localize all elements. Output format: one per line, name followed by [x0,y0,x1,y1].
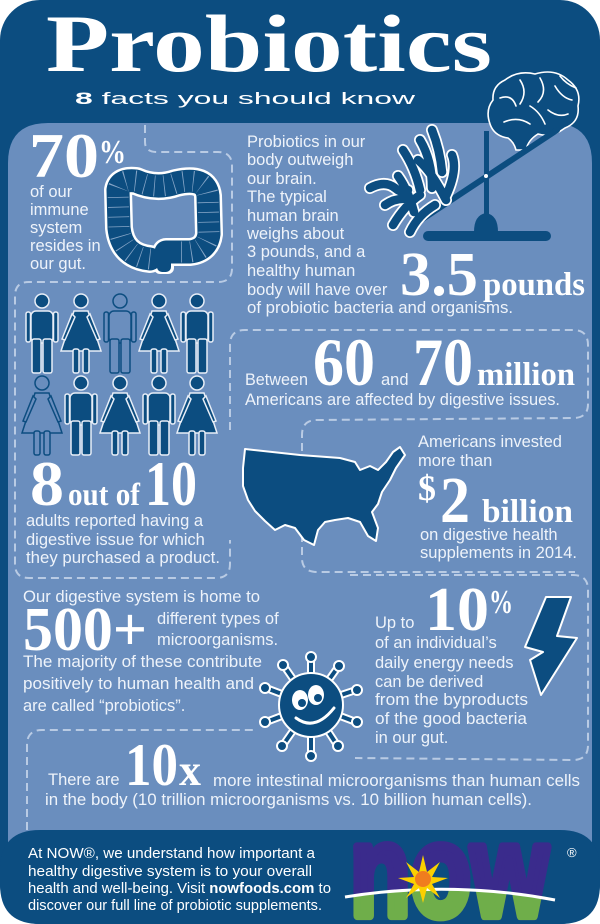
fact 1: 70% immune system: 70 [29,120,99,191]
fact 4: 60 and 70 million: Americans are affected by digestive issues. [245,391,560,409]
fact 4: 60 and 70 million: 70 [413,324,473,400]
fact 7: 10% energy: daily energy needs [375,654,514,672]
fact 2: probiotics outweigh brain text: body outweigh [247,151,353,169]
fact 4: 60 and 70 million: 60 [313,324,375,400]
fact 2: probiotics outweigh brain text: Probiotics in our [247,133,366,151]
subtitle: 8 facts you should know [75,90,415,108]
brain [488,72,579,150]
footer text [28,845,331,914]
fact 8: 10x: in the body (10 trillion microorganisms vs. 10 billion human cells). [45,791,532,809]
light content panel [8,123,592,880]
fact 4: 60 and 70 million [245,324,575,409]
fact 7: 10% energy: 10 [425,576,489,644]
fact 3: 8 out of 10: 10 [145,448,197,519]
fact 7: 10% energy: of the good bacteria [375,710,528,728]
title: Probiotics [46,0,492,89]
fact 7: 10% energy: in our gut. [375,729,448,747]
fact 2: probiotics outweigh brain text: pounds [483,267,585,303]
fact 1: 70% immune system: system [30,219,82,237]
fact 2: probiotics outweigh brain text: of probiotic bacteria and organisms. [247,299,513,317]
fact 2: probiotics outweigh brain text: our brain. [247,170,317,188]
fact 3: 8 out of 10: out of [68,476,140,512]
icon: smiling bacterium [260,652,362,761]
fact 7: 10% energy: from the byproducts [375,691,528,709]
fact 6: 500+ microorganisms: Our digestive system is home to [23,588,260,606]
icon: US map [243,447,405,545]
icon: people grid [22,294,217,455]
fact 2: probiotics outweigh brain text: weighs about [246,225,345,243]
fact 2: probiotics outweigh brain text: The typical [247,188,327,206]
fact 2: probiotics outweigh brain text [246,133,585,317]
fact 7: 10% energy: % [489,584,513,621]
fact 3: 8 out of 10: digestive issue for which [26,531,205,549]
fact 3: 8 out of 10: 8 [30,448,64,519]
fact 3: 8 out of 10: they purchased a product. [26,549,220,567]
fact 8: 10x: 10 [125,732,178,798]
fact 4: 60 and 70 million: million [477,357,575,393]
fact 1: 70% immune system: our gut. [30,255,86,273]
fact 6: 500+ microorganisms: different types of [157,610,279,628]
fact 1: 70% immune system: % [99,134,126,171]
icon: colon [118,181,209,274]
fact 2: probiotics outweigh brain text: 3.5 [400,241,478,309]
fact 2: probiotics outweigh brain text: healthy human [247,262,355,280]
fact 7: 10% energy: of an individual’s [375,634,497,652]
fact 4: 60 and 70 million: Between [245,371,308,389]
fact 8: 10x: There are [48,771,120,789]
logo: NOW [344,841,576,922]
fact 6: 500+ microorganisms: positively to human health and [23,675,254,693]
fact 1: 70% immune system: immune [30,201,89,219]
fact 5: $2 billion: supplements in 2014. [420,544,577,562]
fact 8: 10x [45,732,580,809]
icon: lightning bolt [525,597,577,695]
fact 1: 70% immune system: of our [30,183,73,201]
fact 6: 500+ microorganisms: 500+ [23,596,147,664]
fact 2: probiotics outweigh brain text: body will have over [247,281,388,299]
fact 5: $2 billion: billion [482,494,573,530]
fact 6: 500+ microorganisms: microorganisms. [157,631,278,649]
footer text: discover our full line of probiotic supplements. [28,897,322,914]
fact 5: $2 billion [418,433,577,562]
fact 8: 10x: more intestinal microorganisms than human cells [213,772,580,790]
fact 7: 10% energy: Up to [375,614,414,632]
fact 4: 60 and 70 million: and [381,371,409,389]
footer panel [0,830,600,924]
fact 1: 70% immune system: resides in [30,237,101,255]
icon: scale with brain and bacteria [370,72,579,241]
dashed dividers [15,125,588,830]
fact 6: 500+ microorganisms: are called “probiotics”. [23,697,185,715]
fact 8: 10x: x [179,746,201,795]
fact 5: $2 billion: more than [418,452,492,470]
fact 5: $2 billion: on digestive health [420,526,558,544]
fact 2: probiotics outweigh brain text: 3 pounds, and a [247,243,366,261]
footer text: healthy digestive system is to your overall [28,863,312,880]
fact 6: 500+ microorganisms [23,588,279,715]
fact 5: $2 billion: Americans invested [418,433,562,451]
fact 7: 10% energy [375,576,528,747]
fact 5: $2 billion: $ [418,468,436,508]
fact 3: 8 out of 10: adults reported having a [26,512,204,530]
fact 6: 500+ microorganisms: The majority of these contribute [23,653,262,671]
footer text: health and well-being. Visit nowfoods.com to [28,880,331,897]
logo: NOW: ® [567,845,577,860]
fact 1: 70% immune system [29,120,126,273]
fact 5: $2 billion: 2 [440,464,470,537]
fact 2: probiotics outweigh brain text: human brain [247,207,339,225]
footer text: At NOW®, we understand how important a [28,845,316,862]
fact 3: 8 out of 10 [26,448,220,567]
fact 7: 10% energy: can be derived [375,673,483,691]
